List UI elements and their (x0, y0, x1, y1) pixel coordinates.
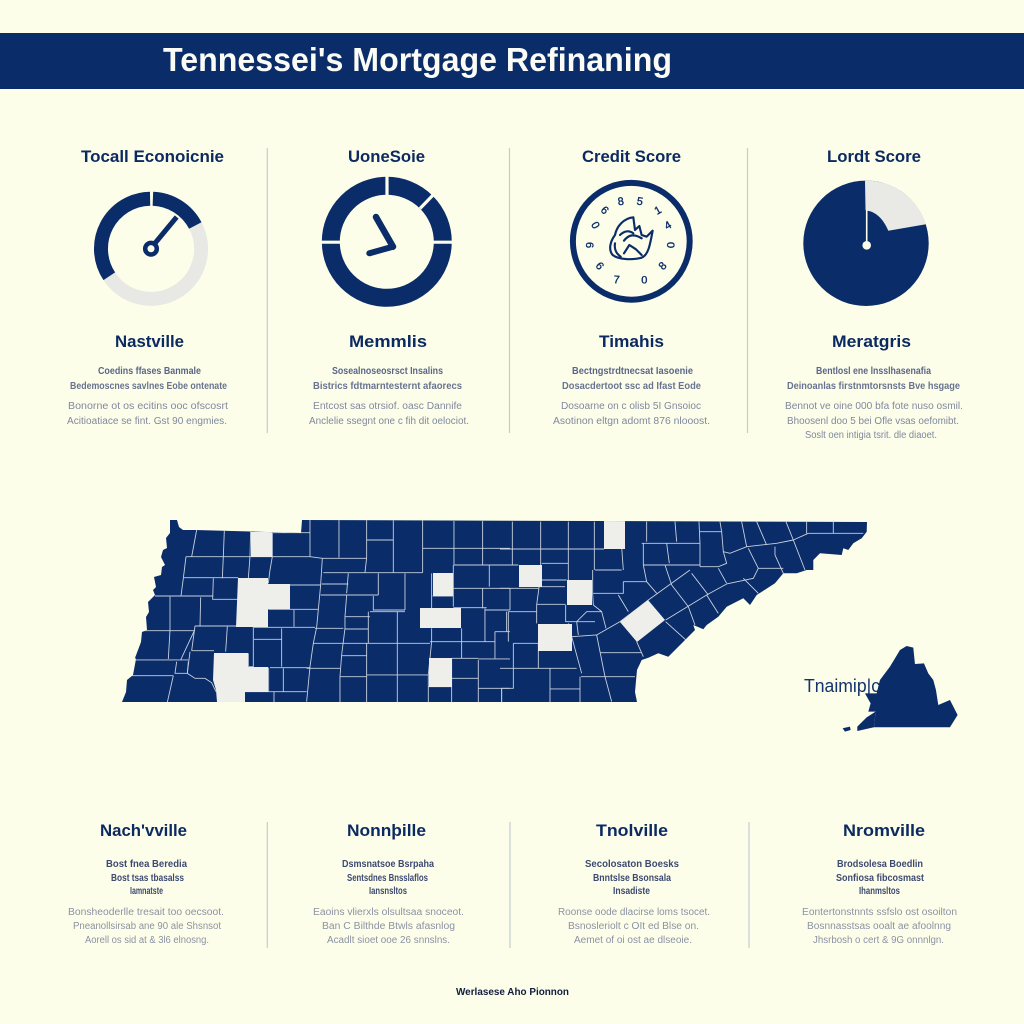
text block: Sosealnoseosrsct Insalins (332, 366, 443, 377)
icon: numbered dial with emblem: 5 (636, 196, 644, 208)
panel: Credit Score (553, 147, 710, 427)
inset silhouette (843, 646, 958, 732)
heading: Nach'vville (100, 821, 187, 840)
icon: numbered dial with emblem: 1 (653, 204, 664, 218)
text block (309, 366, 469, 427)
heading: UoneSoie (348, 147, 425, 166)
text block: Sentsdnes Bnsslaflos (347, 873, 428, 884)
text block: Roonse oode dlacirse loms tsocet. (558, 907, 710, 918)
text block: Acadlt sioet ooe 26 snnslns. (327, 935, 450, 946)
panel: Nach'vville (68, 821, 224, 946)
text block: Bectngstrdtnecsat Iasoenie (572, 366, 693, 377)
heading: Lordt Score (827, 147, 921, 166)
inset map with label (804, 646, 958, 732)
subheading: Meratgris (832, 332, 911, 351)
text block: Bentlosl ene lnsslhasenafia (816, 366, 931, 377)
icon: numbered dial with emblem: 4 (663, 219, 674, 233)
text block: Ban C Bilthde Btwls afasnlog (322, 921, 455, 932)
highlighted counties (213, 520, 665, 702)
text block: Pneanollsirsab ane 90 ale Shsnsot (73, 921, 221, 932)
heading: Credit Score (582, 147, 681, 166)
text block: Bhoosenl doo 5 bei Ofle vsas oefomibt. (787, 416, 959, 427)
icon: numbered dial with emblem: 6 (593, 260, 606, 273)
text block: Entcost sas otrsiof. oasc Dannife (313, 401, 462, 412)
icon: numbered dial with emblem: 0 (588, 220, 602, 231)
panel: Tnolville (558, 821, 710, 946)
county lines east (500, 522, 863, 702)
panel: Nromville (802, 821, 957, 946)
map: Tennessee counties (122, 520, 867, 702)
text block: Iansnsltos (369, 886, 407, 897)
text block: Bost tsas tbasalss (111, 873, 184, 884)
text block: Dosoarne on c olisb 5I Gnsoioc (561, 401, 701, 412)
heading: Nromville (843, 821, 925, 840)
text block (785, 366, 963, 441)
text block (802, 859, 957, 946)
text block (553, 366, 710, 427)
county lines west (132, 520, 510, 702)
icon: numbered dial with emblem: 8 (617, 196, 625, 208)
text block (313, 859, 464, 946)
panel: UoneSoie (309, 147, 469, 427)
icon: numbered dial with emblem: 6 (583, 242, 595, 248)
panel: top column dividers (267, 148, 748, 433)
icon: segmented clock ring (318, 172, 456, 298)
text block: Jhsrbosh o cert & 9G onnnlgn. (813, 935, 944, 946)
text block: Anclelie ssegnt one c fih dit oelociot. (309, 416, 469, 427)
inset label: Tnaimip|c (804, 676, 880, 696)
heading: Tocall Econoicnie (81, 147, 224, 166)
footer: Werlasese Aho Pionnon (456, 987, 569, 998)
text block: Bosnnasstsas ooalt ae afoolnng (807, 921, 951, 932)
text block: Bonsheoderlle tresait too oecsoot. (68, 907, 224, 918)
text block: Soslt oen intigia tsrit. dle diaoet. (805, 430, 937, 441)
text block: Eaoins vlierxls olsultsaa snoceot. (313, 907, 464, 918)
subheading: Memmlis (349, 332, 427, 351)
text block: Bsnosleriolt c OIt ed Blse on. (568, 921, 699, 932)
text block: Aorell os sid at & 3l6 elnosng. (85, 935, 209, 946)
icon: pie chart (803, 181, 929, 306)
text block: Bonorne ot os ecitins ooc ofscosrt (68, 401, 228, 412)
title: Tennessei's Mortgage Refinaning (163, 41, 672, 78)
icon: numbered dial with emblem: 0 (664, 242, 676, 248)
text block: Insadiste (613, 886, 650, 897)
text block: Eontertonstnnts ssfslo ost osoilton (802, 907, 957, 918)
text block: Dosacdertoot ssc ad Ifast Eode (562, 381, 701, 392)
icon: numbered dial with emblem: 7 (613, 274, 620, 287)
text block: Acitioatiace se fint. Gst 90 engmies. (67, 416, 227, 427)
text block: Iamnatste (130, 886, 163, 897)
text block: Bennot ve oine 000 bfa fote nuso osmil. (785, 401, 963, 412)
text block: Coedins ffases Banmale (98, 366, 201, 377)
panel: Tocall Econoicnie (67, 147, 228, 427)
icon: gauge dial (101, 199, 201, 299)
text block: Asotinon eltgn adomt 876 nlooost. (553, 416, 710, 427)
icon: numbered dial with emblem: 6 (598, 204, 611, 217)
text block (67, 366, 228, 427)
text block: Secolosaton Boesks (585, 859, 679, 870)
text block: Dsmsnatsoe Bsrpaha (342, 859, 434, 870)
icon: numbered dial with emblem: 8 (657, 260, 669, 273)
icon: numbered dial with emblem (573, 183, 690, 300)
subheading: Nastville (115, 332, 184, 351)
title banner (0, 33, 1024, 89)
text block: Bost fnea Beredia (106, 859, 187, 870)
text block: Aemet of oi ost ae dlseoie. (574, 935, 692, 946)
text block: Ihanmsltos (859, 886, 900, 897)
subheading: Timahis (599, 332, 664, 351)
panel: bottom column dividers (267, 822, 749, 948)
panel: Lordt Score (785, 147, 963, 441)
text block: Bistrics fdtmarntesternt afaorecs (313, 381, 462, 392)
text block: Bnntslse Bsonsala (593, 873, 671, 884)
text block: Sonfiosa fibcosmast (836, 873, 925, 884)
text block (558, 859, 710, 946)
heading: Tnolville (596, 821, 668, 840)
icon: numbered dial with emblem: 0 (641, 274, 647, 286)
panel: Nonnþille (313, 821, 464, 946)
text block: Brodsolesa Boedlin (837, 859, 923, 870)
text block: Bedemoscnes savlnes Eobe ontenate (70, 381, 227, 392)
heading: Nonnþille (347, 821, 426, 840)
text block: Deinoanlas firstnmtorsnsts Bve hsgage (787, 381, 960, 392)
text block (68, 859, 224, 946)
